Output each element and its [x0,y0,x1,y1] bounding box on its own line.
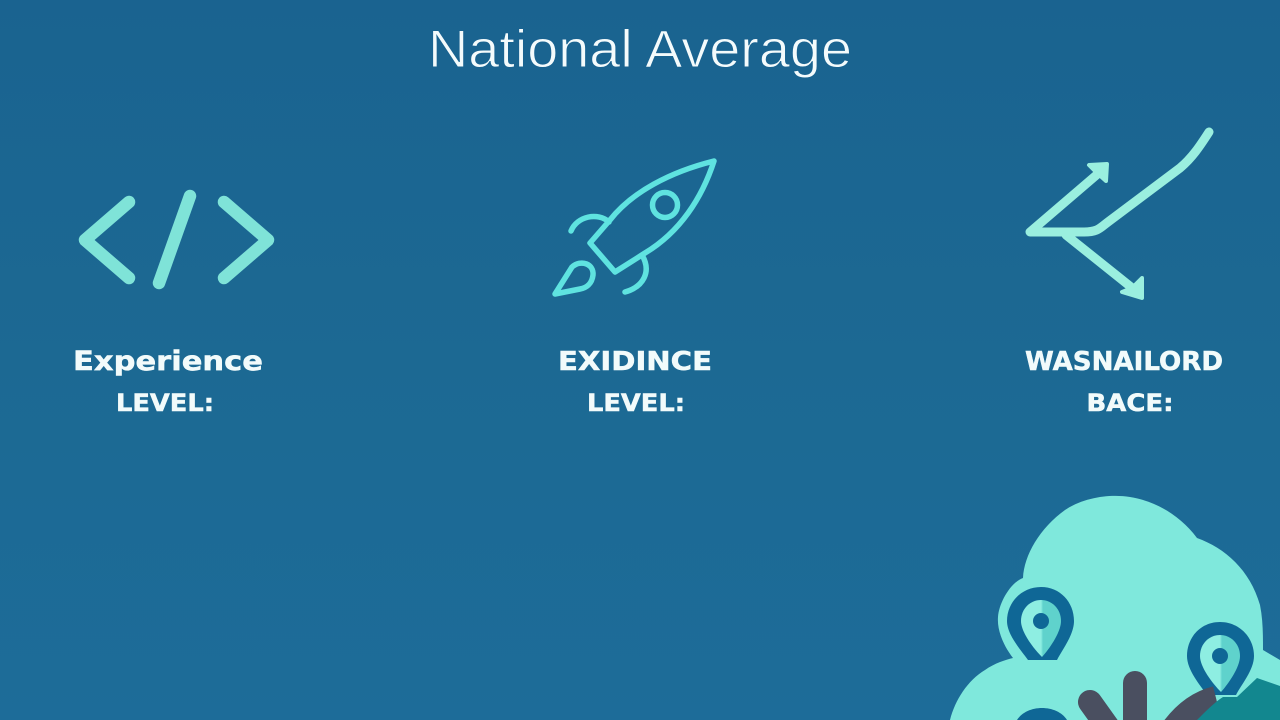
icon: branching arrows [1030,132,1209,298]
label: Wasnailord Bace: WASNAILORD [1025,347,1223,377]
label: Wasnailord Bace [1025,347,1223,417]
column 1: experience level [73,196,268,417]
label: Exiplince Level: LEVEL: [587,389,685,417]
icon: code brackets [85,196,268,283]
column 3: base [1025,132,1223,417]
dark branch strokes [1090,683,1216,720]
cloud shape [950,496,1280,720]
label: Experience Level: Experience [73,346,263,377]
label: Experience Level: LEVEL: [116,389,214,417]
column 2: expertise level [555,161,714,417]
label: Experience Level [73,346,263,417]
label: Exiplince Level: EXIDINCE [558,347,712,377]
label: Exiplince Level [558,347,712,417]
partial pin at bottom [1017,708,1067,720]
map pin right [1187,622,1254,695]
label: Wasnailord Bace: BACE: [1086,389,1174,417]
illustration: cloud with map pins [950,496,1280,720]
teal corner shape [1197,678,1280,720]
title: National Average [428,20,852,79]
map pin left [1007,587,1074,660]
icon: rocket [555,161,714,294]
